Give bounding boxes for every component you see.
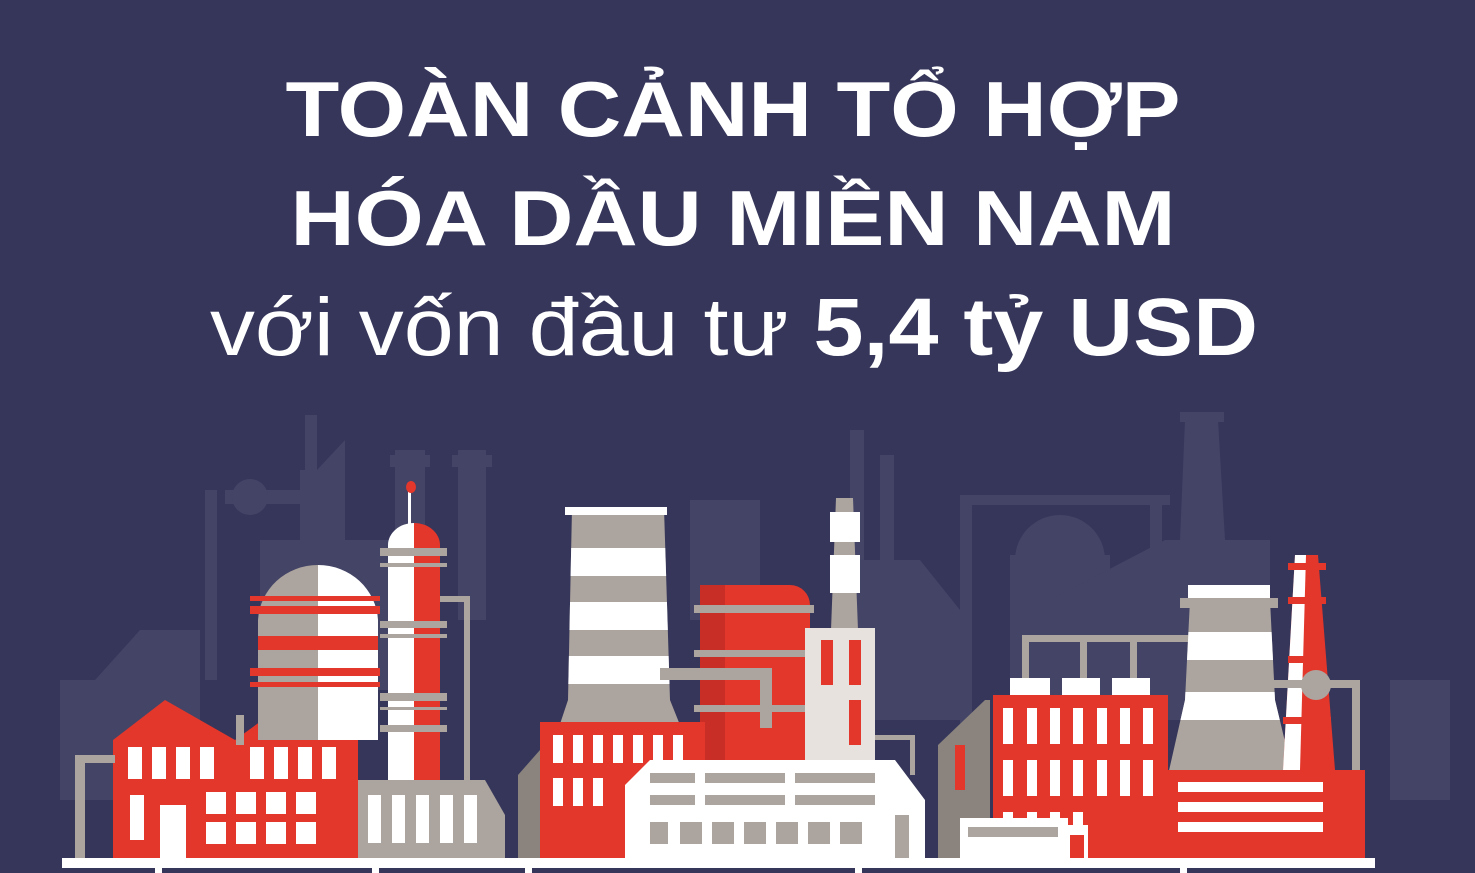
red tank 2 (660, 585, 814, 760)
dome tank (250, 565, 380, 740)
title line 1: TOÀN CẢNH TỔ HỢP (286, 65, 1180, 153)
white building front (625, 760, 925, 858)
title line 2: HÓA DẦU MIỀN NAM (290, 174, 1176, 262)
distillation column (236, 481, 470, 781)
red house left (75, 700, 358, 858)
pipe frame (1022, 635, 1192, 685)
gray slanted building right (938, 700, 990, 858)
red building right (960, 678, 1168, 858)
subtitle investment: với vốn đầu tư 5,4 tỷ USD (210, 282, 1258, 373)
cooling tower 2 (1169, 585, 1284, 770)
chimney center (805, 498, 915, 775)
background factory silhouettes (60, 412, 1450, 800)
gray building (358, 780, 505, 858)
red chimney right (1272, 555, 1360, 795)
red building center (518, 722, 705, 858)
red building bottom right (1165, 770, 1365, 858)
ground base (62, 858, 1375, 873)
cooling tower 1 (560, 507, 679, 722)
title (210, 65, 1258, 373)
